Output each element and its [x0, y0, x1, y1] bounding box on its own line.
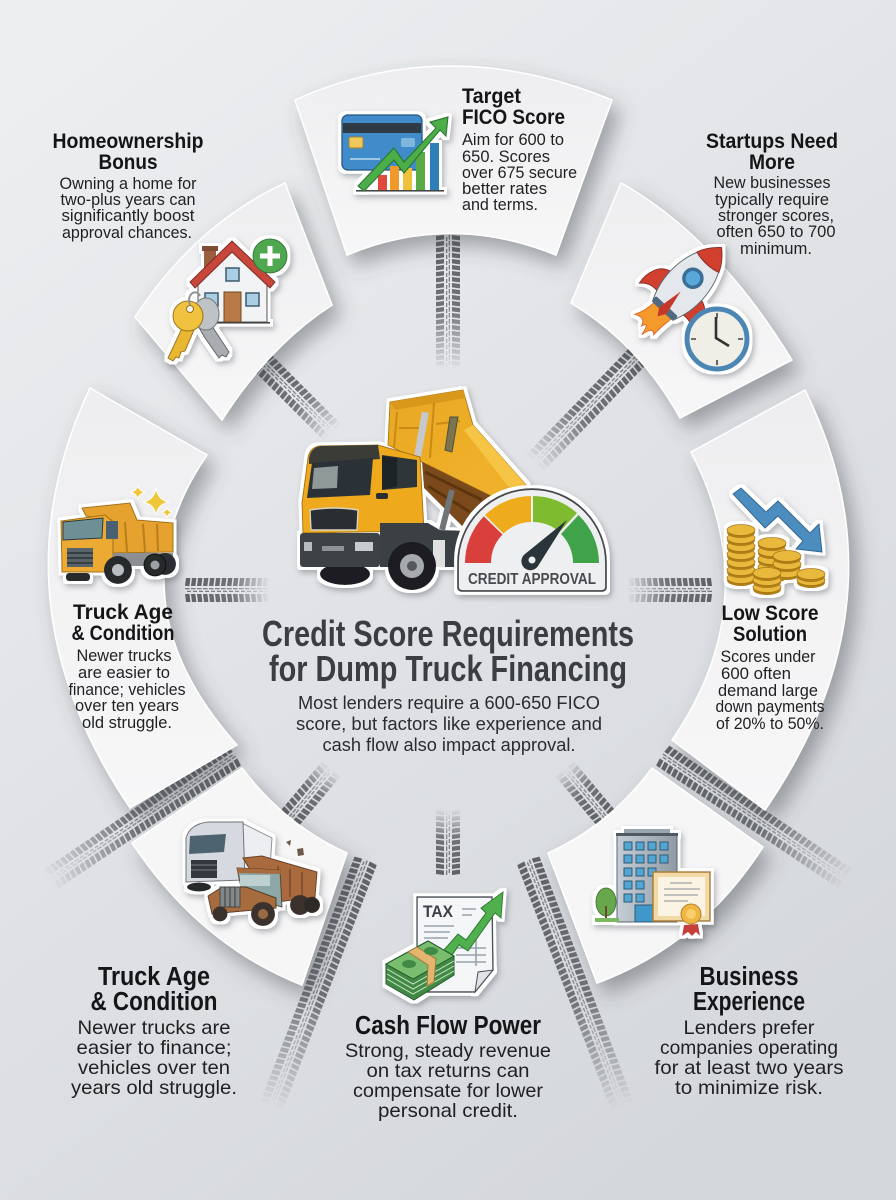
hero: dump truck with credit gauge: [300, 390, 606, 591]
icon: new and rusty trucks: [186, 822, 320, 926]
body text: to minimize risk.: [675, 1077, 823, 1099]
heading: [462, 84, 565, 129]
heading: Startups Need: [706, 129, 838, 153]
panel: homeownership bonus: [52, 129, 332, 420]
body text: finance; vehicles: [68, 681, 186, 699]
panel: business experience: [548, 768, 844, 1099]
panel: target FICO score: [295, 66, 612, 255]
panel: cash flow power: [345, 892, 551, 1122]
gauge red zone: [465, 516, 502, 563]
body text: Scores under: [720, 648, 816, 666]
heading: [90, 963, 218, 1016]
icon: falling arrow and coins: [727, 488, 825, 595]
heading: & Condition: [90, 988, 218, 1016]
body text: old struggle.: [82, 714, 172, 732]
icon: office building and certificate: [595, 829, 710, 936]
title: Credit Score Requirements: [262, 613, 634, 654]
body text: down payments: [716, 698, 824, 716]
heading: & Condition: [72, 621, 174, 645]
intro text: cash flow also impact approval.: [322, 734, 576, 755]
heading: Target: [462, 84, 521, 108]
title: [262, 613, 634, 689]
body text: Newer trucks: [76, 647, 172, 665]
body text: years old struggle.: [71, 1077, 237, 1099]
icon: dust specks: [286, 840, 304, 856]
title: for Dump Truck Financing: [269, 648, 627, 689]
body text: over ten years: [75, 697, 179, 715]
heading: [72, 600, 174, 645]
body text: and terms.: [462, 196, 538, 214]
heading: Bonus: [98, 150, 158, 174]
gauge body: [458, 489, 606, 591]
intro text: score, but factors like experience and: [296, 713, 602, 734]
body text: [345, 1040, 551, 1122]
body text: for at least two years: [654, 1057, 844, 1079]
heading: More: [749, 150, 795, 174]
body text: [68, 647, 186, 732]
body text: approval chances.: [62, 224, 192, 242]
body text: often 650 to 700: [716, 223, 836, 241]
body text: Strong, steady revenue: [345, 1040, 551, 1062]
body text: [462, 131, 577, 214]
panel: truck age and condition (left): [48, 388, 237, 808]
body text: [714, 174, 836, 258]
icon: tax form and money: [386, 892, 503, 1000]
body text: Aim for 600 to: [462, 131, 564, 149]
body text: significantly boost: [62, 207, 195, 225]
credit approval gauge: [458, 489, 606, 591]
body text: [60, 175, 197, 242]
body text: Owning a home for: [60, 175, 197, 193]
panel shape: [548, 768, 763, 983]
tire tracks: [42, 235, 855, 1112]
body text: of 20% to 50%.: [716, 715, 824, 733]
heading: Business: [700, 963, 798, 991]
body text: New businesses: [714, 174, 830, 192]
heading: Truck Age: [98, 963, 210, 991]
panel shape: [132, 768, 347, 985]
panel shape: [295, 66, 612, 255]
body text: on tax returns can: [366, 1060, 530, 1082]
body text: [654, 1017, 844, 1099]
body text: typically require: [715, 191, 829, 209]
heading: Homeownership: [52, 129, 204, 153]
heading: Solution: [733, 622, 807, 646]
gauge light green zone: [533, 496, 577, 532]
intro text: Most lenders require a 600-650 FICO: [298, 692, 600, 713]
panel shape: [48, 388, 237, 808]
heading: [706, 129, 838, 174]
icon: clean dump truck with sparkles: [61, 503, 176, 584]
body text: 600 often: [721, 665, 791, 683]
body text: easier to finance;: [76, 1037, 232, 1059]
icon: dump truck: [300, 390, 527, 590]
body text: Newer trucks are: [78, 1017, 230, 1039]
panel: low score solution: [672, 390, 849, 810]
heading: Truck Age: [73, 600, 173, 624]
intro text: [296, 692, 602, 755]
body text: minimum.: [740, 240, 812, 258]
heading: Experience: [693, 988, 805, 1016]
body text: [716, 648, 824, 733]
body text: better rates: [462, 180, 547, 198]
heading: Low Score: [722, 601, 819, 625]
heading: [722, 601, 819, 646]
panel shape: [672, 390, 849, 810]
heading: [693, 963, 805, 1016]
panel shape: [571, 183, 792, 418]
icon: credit card and rising chart: [342, 115, 448, 192]
icon: sparkles: [131, 486, 172, 518]
icon: tax form and money: TAX: [423, 902, 454, 921]
heading: [52, 129, 204, 174]
body text: vehicles over ten: [78, 1057, 230, 1079]
gauge needle: [521, 520, 567, 570]
body text: stronger scores,: [718, 207, 834, 225]
gauge label: CREDIT APPROVAL: [468, 571, 596, 588]
body text: Lenders prefer: [684, 1017, 815, 1039]
body text: are easier to: [78, 664, 170, 682]
body text: personal credit.: [378, 1100, 518, 1122]
body text: compensate for lower: [353, 1080, 544, 1102]
panel: startups need more: [571, 129, 838, 418]
body text: two-plus years can: [60, 191, 196, 209]
gauge amber zone: [485, 496, 531, 534]
icon: house and keys: [168, 239, 287, 361]
heading: FICO Score: [462, 105, 565, 129]
body text: demand large: [718, 682, 818, 700]
body text: 650. Scores: [462, 148, 550, 166]
body text: [71, 1017, 237, 1099]
body text: companies operating: [660, 1037, 838, 1059]
panel: truck age and condition (lower): [71, 768, 347, 1099]
heading: Cash Flow Power: [355, 1012, 541, 1040]
panel shape: [135, 183, 332, 420]
gauge green zone: [561, 515, 599, 563]
body text: over 675 secure: [462, 164, 577, 182]
icon: rocket and clock: [614, 223, 748, 369]
